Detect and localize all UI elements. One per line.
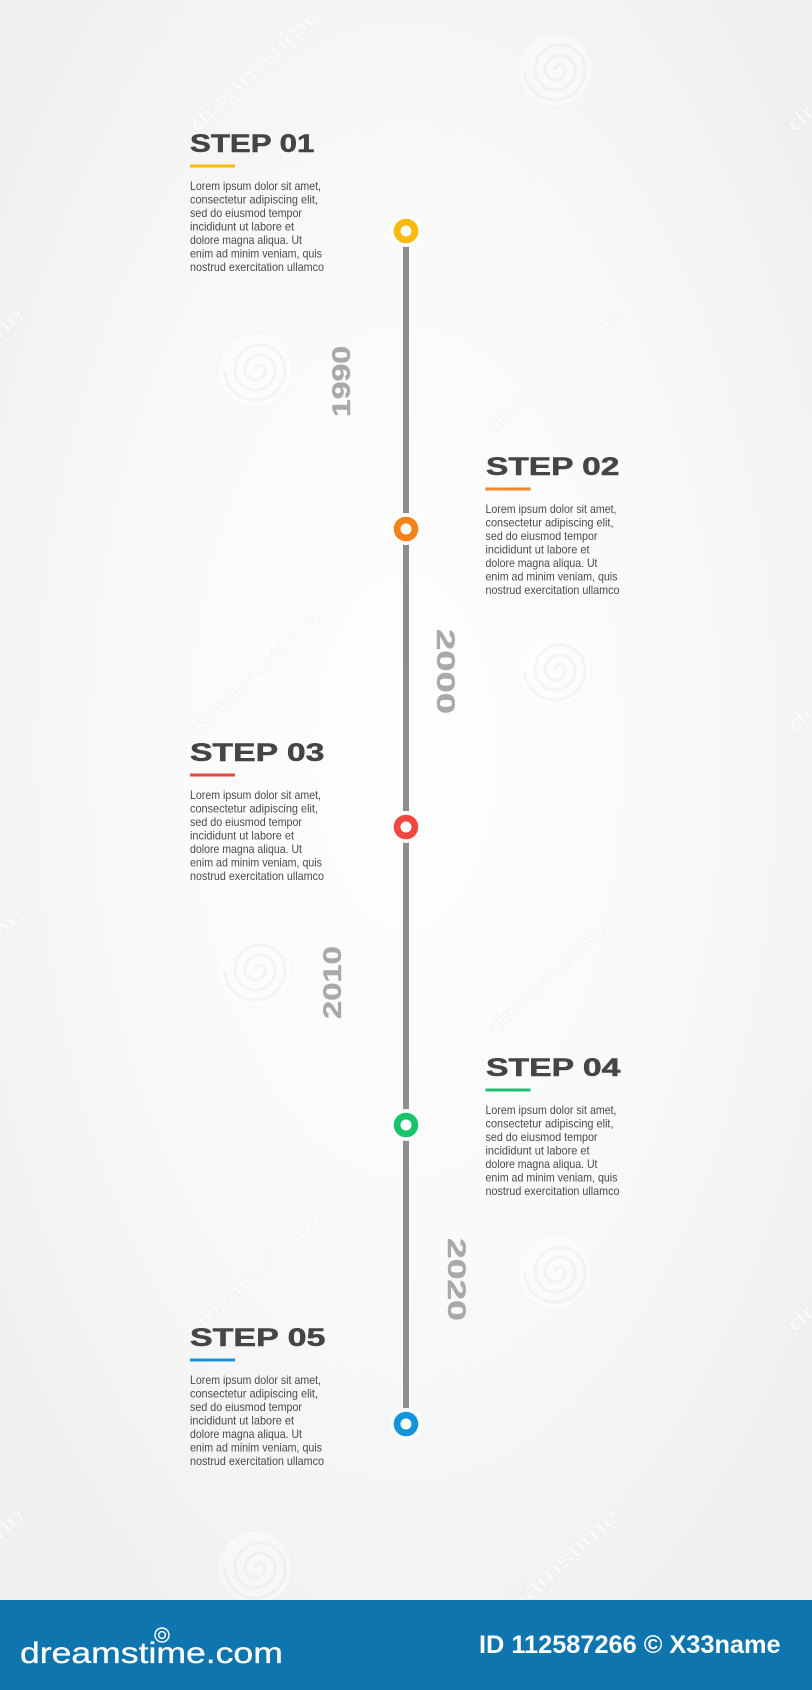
year: 1990: 1990 <box>328 346 356 417</box>
body text: step 01: enim ad minim veniam, quis <box>190 248 322 260</box>
footer bar <box>0 1600 812 1690</box>
footer logo text: dreamstime.com <box>20 1636 283 1669</box>
body text: step 01 <box>190 180 324 274</box>
body text: step 05: incididunt ut labore et <box>190 1414 295 1428</box>
panel: step 04 <box>486 1054 621 1198</box>
body text: step 04: consectetur adipiscing elit, <box>486 1118 614 1130</box>
watermark text: dreamstime <box>184 606 326 740</box>
body text: step 03: consectetur adipiscing elit, <box>190 802 318 816</box>
body text: step 02: Lorem ipsum dolor sit amet, <box>486 503 616 516</box>
body text: step 05 <box>190 1374 324 1468</box>
body text: step 04: enim ad minim veniam, quis <box>486 1172 618 1184</box>
year: 2010: 2010 <box>320 946 347 1019</box>
body text: step 05: dolore magna aliqua. Ut <box>190 1428 303 1441</box>
body text: step 03: Lorem ipsum dolor sit amet, <box>190 789 321 802</box>
watermark text: dreamstime <box>184 1206 326 1340</box>
heading: step 05: STEP 05 <box>190 1324 325 1352</box>
watermark text: dreamstime <box>482 1503 624 1637</box>
body text: step 01: nostrud exercitation ullamco <box>190 261 324 274</box>
accent bar: step 02 <box>486 488 530 490</box>
body text: step 03: sed do eiusmod tempor <box>190 816 302 829</box>
body text: step 05: enim ad minim veniam, quis <box>190 1442 322 1454</box>
body text: step 04: nostrud exercitation ullamco <box>486 1185 620 1198</box>
accent bar: step 05 <box>190 1358 235 1362</box>
marker: step 02 <box>390 513 422 545</box>
marker: step 01 <box>390 215 422 247</box>
body text: step 01: incididunt ut labore et <box>190 220 295 234</box>
accent bar: step 03 <box>190 774 235 776</box>
body text: step 01: consectetur adipiscing elit, <box>190 194 318 206</box>
marker: step 04 <box>390 1109 422 1141</box>
panel: step 01 <box>190 129 324 274</box>
body text: step 03: incididunt ut labore et <box>190 830 295 842</box>
panel: step 02 <box>486 453 620 597</box>
accent bar: step 04 <box>486 1088 530 1092</box>
watermark text: dreamstime <box>184 2 326 136</box>
body text: step 01: Lorem ipsum dolor sit amet, <box>190 180 321 193</box>
year: 2000: 2000 <box>432 629 459 714</box>
body text: step 03: nostrud exercitation ullamco <box>190 870 324 883</box>
panel: step 03 <box>190 739 324 883</box>
body text: step 04: dolore magna aliqua. Ut <box>486 1158 598 1171</box>
heading: step 02: STEP 02 <box>486 453 619 481</box>
body text: step 02: nostrud exercitation ullamco <box>486 584 620 597</box>
timeline vertical line <box>403 231 409 1424</box>
icon: logo spiral <box>155 1628 169 1642</box>
body text: step 01: dolore magna aliqua. Ut <box>190 234 303 247</box>
body text: step 02: consectetur adipiscing elit, <box>486 516 614 530</box>
body text: step 02: dolore magna aliqua. Ut <box>486 557 598 570</box>
body text: step 05: nostrud exercitation ullamco <box>190 1455 324 1468</box>
body text: step 04: Lorem ipsum dolor sit amet, <box>486 1104 616 1117</box>
body text: step 05: Lorem ipsum dolor sit amet, <box>190 1374 321 1387</box>
marker: step 05 <box>390 1408 422 1440</box>
body text: step 02: incididunt ut labore et <box>486 544 590 556</box>
body text: step 03 <box>190 789 324 883</box>
body text: step 04: incididunt ut labore et <box>486 1144 590 1158</box>
body text: step 05: consectetur adipiscing elit, <box>190 1388 318 1400</box>
heading: step 01: STEP 01 <box>190 129 314 157</box>
body text: step 04: sed do eiusmod tempor <box>486 1131 598 1144</box>
marker: step 03 <box>390 811 422 843</box>
body text: step 03: enim ad minim veniam, quis <box>190 856 322 870</box>
year: 2020: 2020 <box>442 1238 471 1321</box>
body text: step 04 <box>486 1104 620 1198</box>
body text: step 02: enim ad minim veniam, quis <box>486 570 618 584</box>
body text: step 01: sed do eiusmod tempor <box>190 207 302 220</box>
accent bar: step 01 <box>190 164 235 168</box>
body text: step 02 <box>486 503 620 597</box>
heading: step 03: STEP 03 <box>190 739 324 767</box>
footer credit: ID 112587266 © X33name <box>479 1631 781 1659</box>
body text: step 03: dolore magna aliqua. Ut <box>190 843 303 856</box>
watermark spirals <box>218 33 592 1605</box>
watermark text: dreamstime <box>482 905 624 1039</box>
watermark text: dreamstime <box>482 304 624 438</box>
body text: step 02: sed do eiusmod tempor <box>486 530 598 543</box>
body text: step 05: sed do eiusmod tempor <box>190 1401 302 1414</box>
panel: step 05 <box>190 1324 325 1468</box>
heading: step 04: STEP 04 <box>486 1054 621 1082</box>
